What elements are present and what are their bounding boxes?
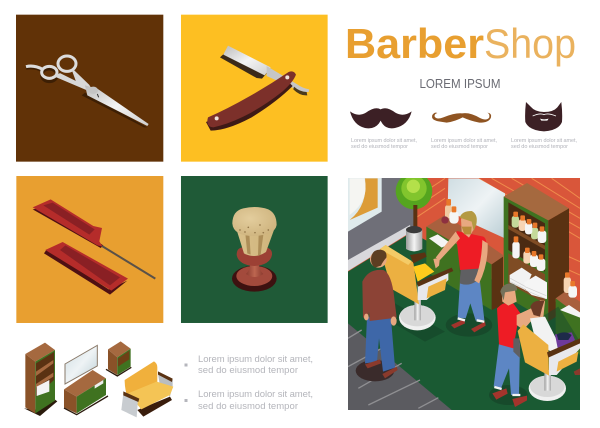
- icon: tail comb: [33, 199, 155, 279]
- plant: [396, 173, 432, 251]
- text block: beard: sed do eiusmod tempor: [511, 144, 568, 150]
- icon: barber chair: [121, 361, 173, 417]
- icon: shaving brush: [232, 207, 277, 292]
- shelf bottles: [512, 212, 546, 271]
- towels: [510, 268, 547, 299]
- title: Barber: [345, 20, 484, 67]
- icon: tall shelf: [24, 343, 57, 416]
- back wall: [345, 175, 585, 415]
- icon: pocket comb: [44, 242, 128, 295]
- grey walkway: [348, 323, 452, 410]
- title: Shop: [484, 20, 576, 67]
- subtitle: LOREM IPSUM: [420, 77, 500, 91]
- grey side wall: [348, 178, 415, 265]
- icon: small cabinet: [106, 341, 131, 376]
- barber one: [433, 211, 492, 337]
- wall poster: [348, 178, 382, 232]
- bullet one: [184, 364, 188, 366]
- panel: combs: [16, 176, 163, 323]
- bullet text two: Lorem ipsum dolor sit amet,: [198, 389, 313, 400]
- icon: beard: [525, 102, 562, 131]
- panel: shaving brush: [181, 176, 328, 323]
- side counter: [556, 272, 580, 355]
- panel: razor: [181, 15, 328, 162]
- text block: moustache one: sed do eiusmod tempor: [351, 144, 408, 150]
- bookcase: [504, 183, 569, 322]
- counter bottles: [441, 199, 459, 224]
- floor: [348, 232, 580, 410]
- skirting: [348, 225, 412, 271]
- bullet text two: sed do eiusmod tempor: [198, 401, 298, 412]
- text block: beard: Lorem ipsum dolor sit amet,: [511, 138, 577, 144]
- bullet text one: sed do eiusmod tempor: [198, 365, 298, 376]
- text block: moustache two: sed do eiusmod tempor: [431, 144, 488, 150]
- icon: full moustache: [350, 108, 412, 128]
- customer seated and chair two: [518, 300, 580, 401]
- icon: thin moustache: [432, 113, 491, 123]
- bullet two: [184, 399, 188, 402]
- chair one: [380, 245, 453, 342]
- text block: moustache one: Lorem ipsum dolor sit amet,: [351, 138, 417, 144]
- icon: mirror counter: [64, 345, 108, 415]
- text block: moustache two: Lorem ipsum dolor sit amet,: [431, 138, 497, 144]
- back counter: [426, 215, 503, 310]
- panel: scissors: [16, 15, 163, 162]
- customer standing: [356, 250, 398, 381]
- icon: straight razor: [206, 46, 309, 131]
- barber two: [489, 283, 542, 407]
- mirror: [448, 178, 505, 238]
- illustration: barber shop scene: [348, 178, 580, 410]
- furniture set: [24, 341, 173, 417]
- bullet text one: Lorem ipsum dolor sit amet,: [198, 354, 313, 365]
- title: [345, 20, 576, 67]
- icon: scissors: [26, 56, 149, 127]
